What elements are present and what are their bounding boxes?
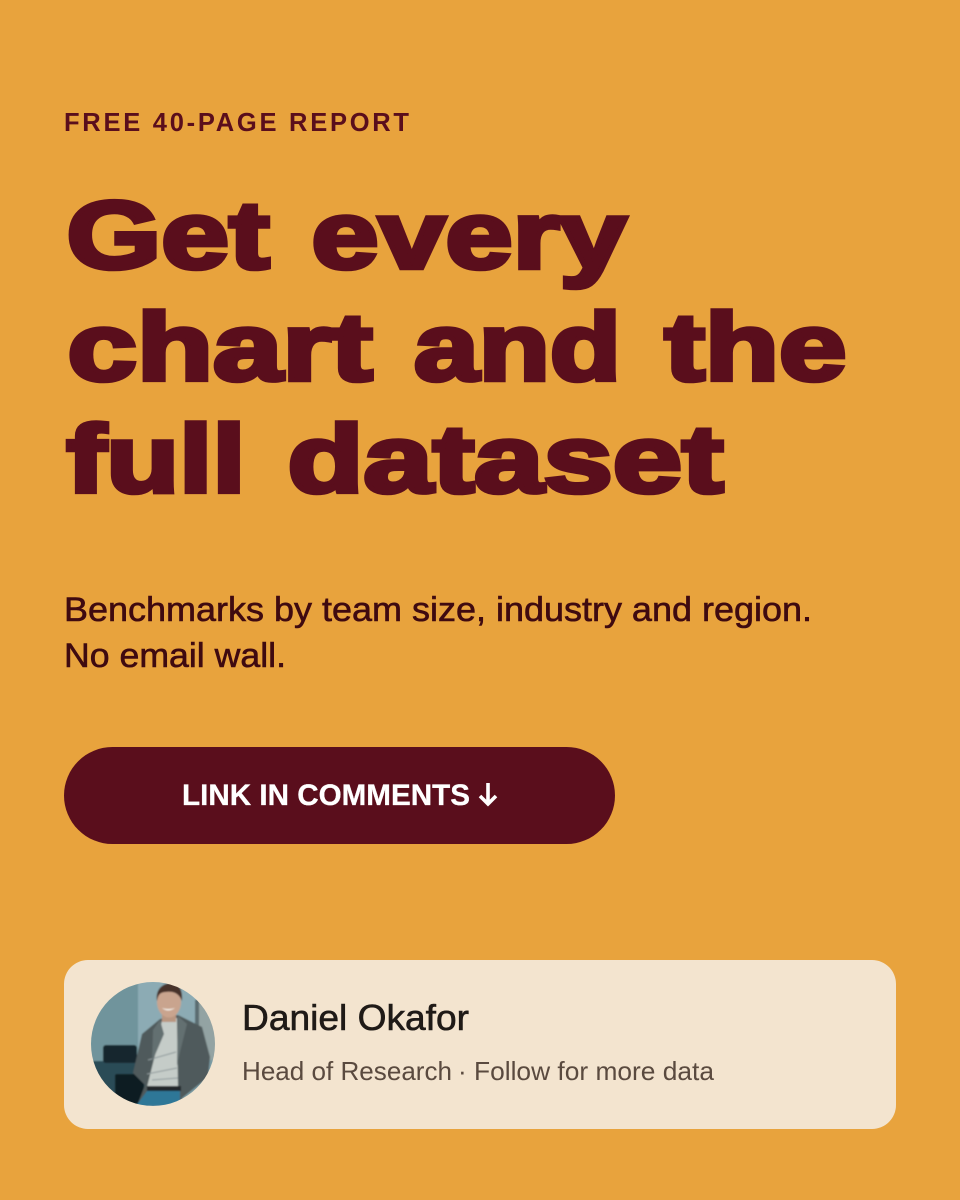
avatar photo	[88, 979, 218, 1109]
kicker: free 40-page report: FREE 40-PAGE REPORT	[64, 109, 409, 137]
author role: Follow for more data	[474, 1056, 715, 1086]
title: full	[66, 406, 246, 513]
suit and shirt	[133, 1015, 210, 1106]
author name: Daniel Okafor	[242, 997, 469, 1038]
title: the	[664, 294, 846, 401]
panel: author card	[64, 960, 896, 1129]
title: chart	[68, 294, 372, 401]
subtitle text	[64, 591, 812, 675]
author role: Head of Research	[242, 1056, 452, 1086]
call-to-action button: LINK IN COMMENTS	[182, 779, 470, 812]
head	[161, 1014, 177, 1022]
subtitle text: No email wall.	[64, 637, 286, 675]
call-to-action button	[64, 747, 615, 844]
author role: ·	[458, 1056, 467, 1086]
icon: down arrow	[480, 783, 496, 804]
title	[66, 182, 846, 513]
title: Get	[66, 182, 270, 289]
title: dataset	[288, 406, 724, 513]
title: every	[312, 182, 626, 289]
subtitle text: Benchmarks by team size, industry and region.	[64, 591, 812, 629]
title: and	[414, 294, 621, 401]
author role	[242, 1056, 715, 1086]
